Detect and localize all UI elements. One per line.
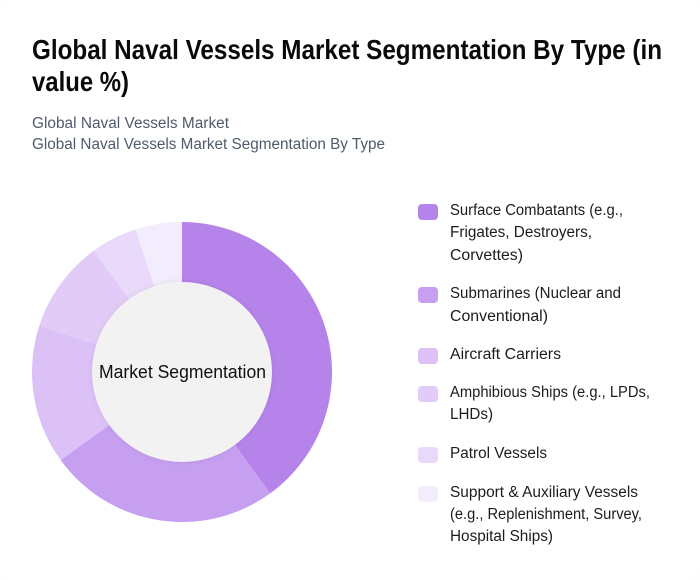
legend item: Support and Auxiliary Vessels: Hospital Ships)	[450, 528, 553, 545]
subtitle	[32, 115, 385, 153]
legend item: Amphibious Ships	[418, 384, 650, 423]
legend item: Submarines: Conventional)	[450, 308, 548, 325]
subtitle: Global Naval Vessels Market	[32, 115, 230, 132]
legend item: Surface Combatants: Surface Combatants (e.g.,	[450, 202, 623, 219]
legend item: Amphibious Ships: Amphibious Ships (e.g., LPDs,	[450, 384, 650, 401]
subtitle: Global Naval Vessels Market Segmentation By Type	[32, 136, 385, 153]
title	[32, 34, 662, 97]
segment: Amphibious Ships	[39, 251, 182, 372]
legend item: Submarines: Submarines (Nuclear and	[450, 285, 621, 302]
legend item: Submarines	[418, 285, 621, 325]
legend item: Support and Auxiliary Vessels: (e.g., Replenishment, Survey,	[450, 506, 642, 523]
legend item: Support and Auxiliary Vessels: Support & Auxiliary Vessels	[450, 484, 638, 501]
legend item: Support and Auxiliary Vessels	[418, 484, 642, 545]
legend item: Surface Combatants: Corvettes)	[450, 247, 523, 264]
legend item: Patrol Vessels: Patrol Vessels	[450, 445, 547, 462]
legend item: Surface Combatants: Frigates, Destroyers,	[450, 224, 592, 241]
legend	[418, 202, 650, 545]
segment: Support and Auxiliary Vessels	[136, 222, 182, 372]
segment: Surface Combatants	[182, 222, 332, 493]
segment: Aircraft Carriers	[32, 326, 182, 460]
donut chart	[32, 222, 332, 522]
segment: Submarines	[61, 372, 270, 522]
legend item: Amphibious Ships: LHDs)	[450, 406, 493, 423]
legend item: Aircraft Carriers: Aircraft Carriers	[450, 346, 561, 363]
donut centre	[92, 282, 272, 462]
segment: Patrol Vessels	[94, 229, 182, 372]
legend item: Surface Combatants	[418, 202, 623, 264]
title: value %)	[32, 66, 129, 97]
centre label: Market Segmentation	[99, 362, 266, 382]
